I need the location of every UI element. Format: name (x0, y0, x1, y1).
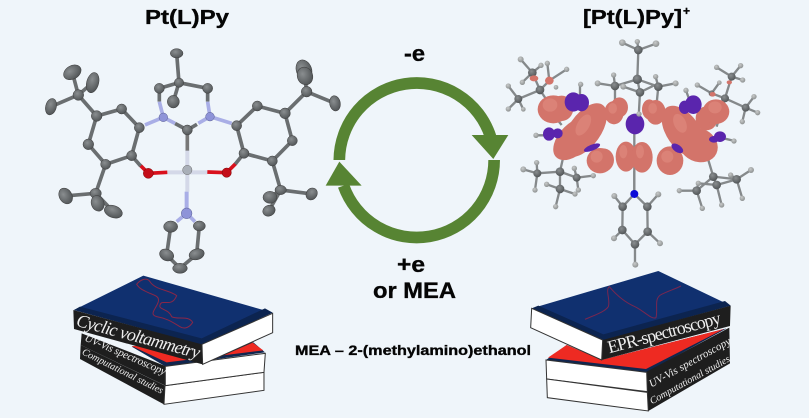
book: cyclic voltammetry (73, 276, 273, 364)
right molecule: spin density (506, 39, 760, 268)
book: UV-Vis spectroscopy: UV-Vis spectroscopy (83, 332, 168, 378)
cycle arrows (326, 83, 508, 238)
left molecule: ORTEP structure (44, 49, 342, 273)
book: computational studies (80, 345, 264, 404)
title: [Pt(L)Py]+: [Pt(L)Py] (583, 7, 682, 29)
label: UV-Vis spectroscopy: UV-Vis spectroscopy (647, 335, 733, 390)
right book stack (531, 271, 733, 411)
label: computational studies: Computational studies (648, 354, 732, 407)
book: EPR spectroscopy (531, 271, 731, 360)
title: [Pt(L)Py]+: + (683, 4, 690, 18)
left book stack (73, 276, 273, 404)
title: [Pt(L)Py]+ (583, 4, 690, 29)
label: -e: -e (404, 41, 425, 66)
title: Pt(L)Py: Pt(L)Py (145, 7, 230, 29)
arrow: reduction (bottom) (326, 160, 494, 238)
book: lower pair with red cover (546, 328, 733, 411)
book: UV-Vis spectroscopy (81, 332, 265, 386)
label: or MEA: or MEA (373, 278, 456, 303)
book: EPR spectroscopy: EPR-spectroscopy (605, 308, 723, 357)
book: computational studies: Computational studies (80, 347, 165, 397)
arrow: oxidation (top) (339, 83, 508, 160)
book: cyclic voltammetry: Cyclic voltammetry (74, 310, 202, 362)
reagent definition: MEA – 2-(methylamino)ethanol (295, 342, 531, 358)
label: +e: +e (397, 252, 425, 277)
